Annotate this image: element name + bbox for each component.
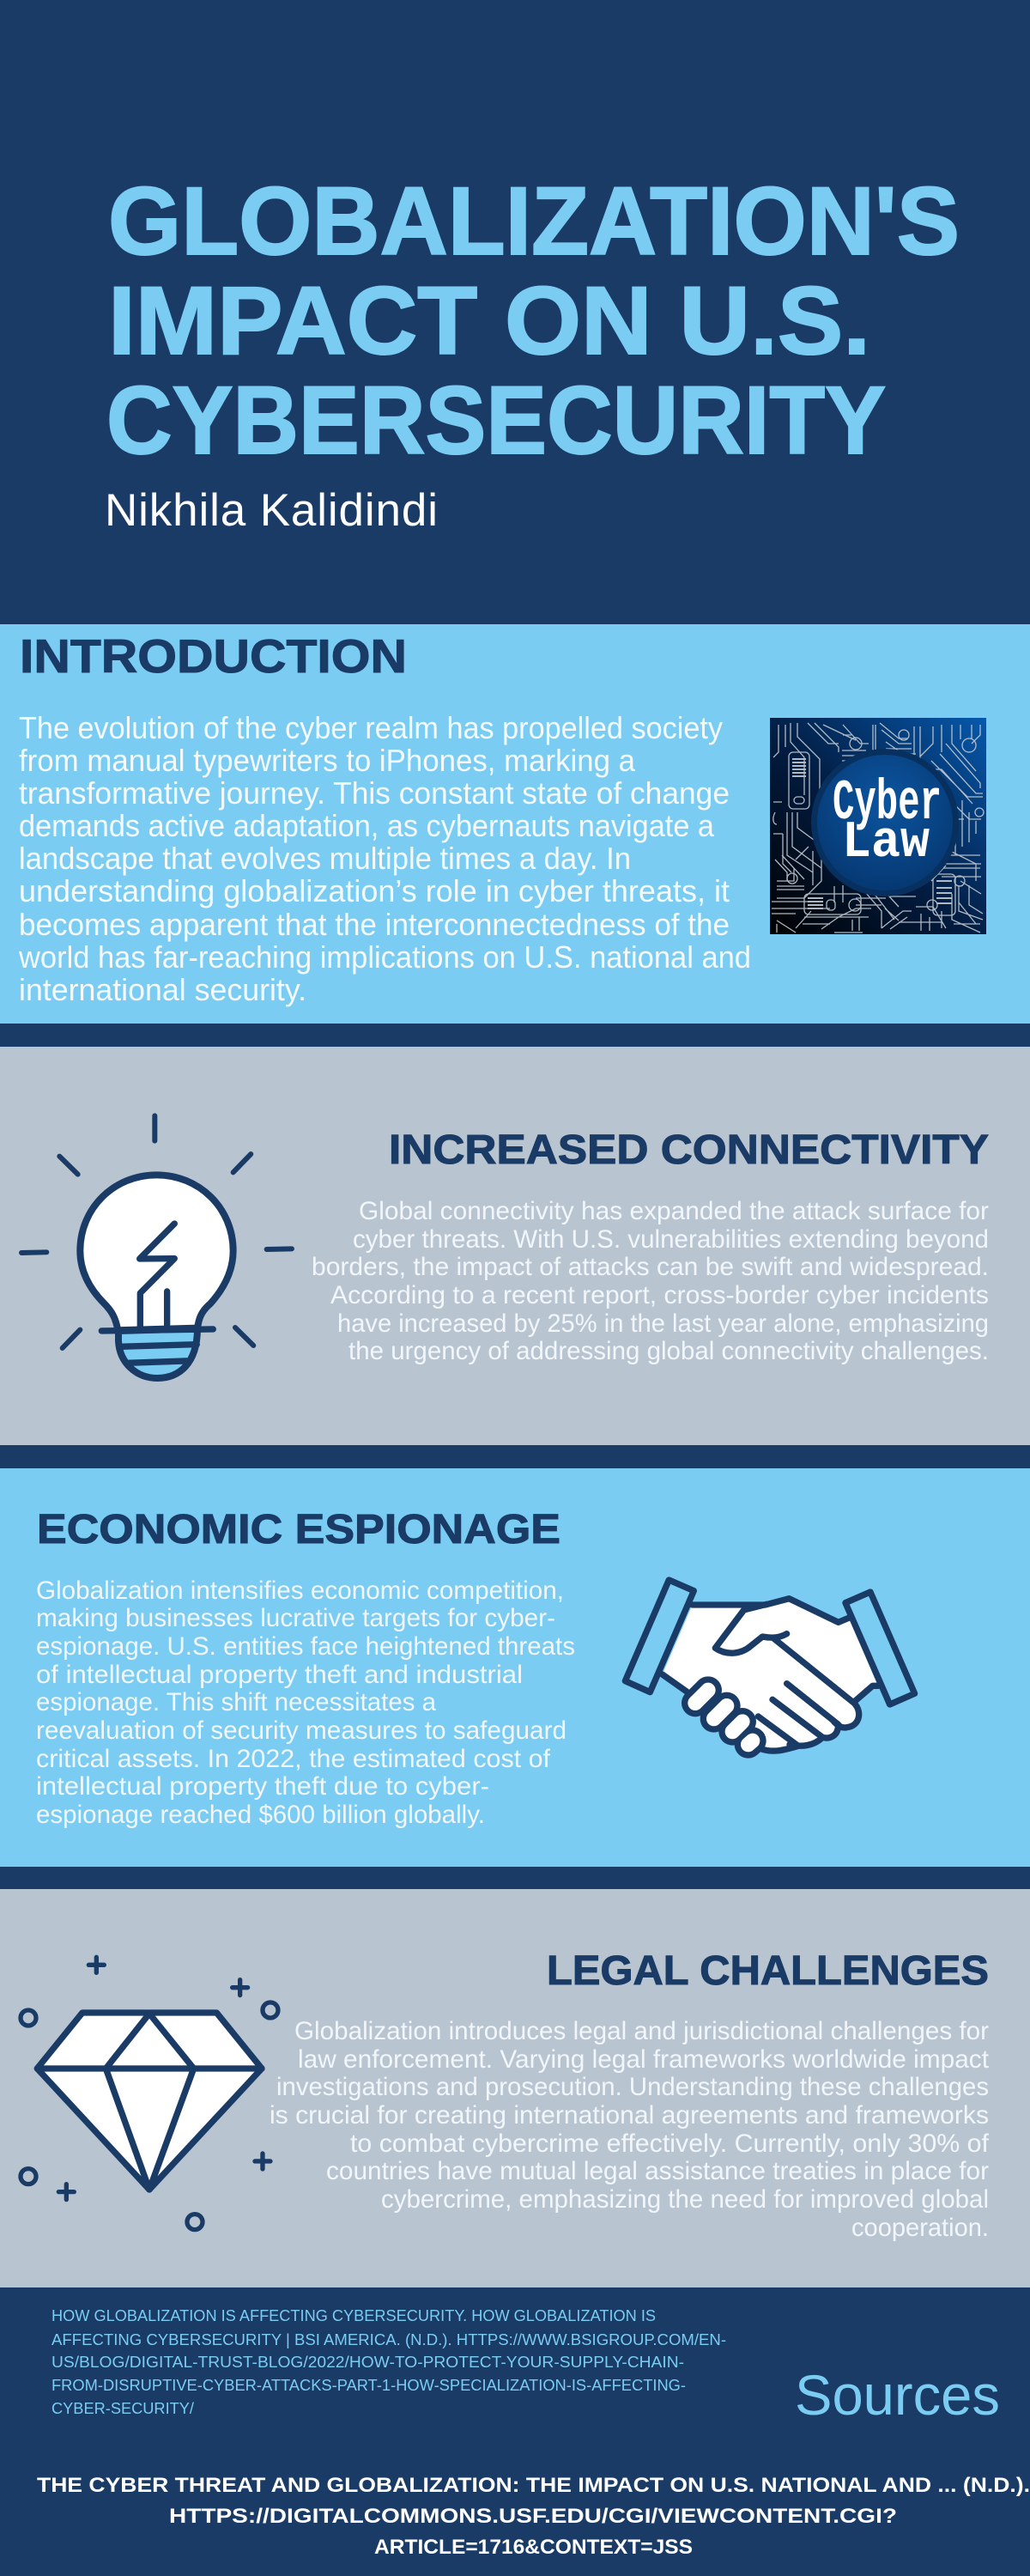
text block: legal challenges: countries have mutual legal assistance treaties in place for (326, 2157, 989, 2185)
text block: economic espionage: espionage reached $600 billion globally. (36, 1801, 485, 1829)
text block: economic espionage: critical assets. In 2022, the estimated cost of (36, 1745, 551, 1773)
text block: legal challenges (270, 2017, 990, 2242)
text block: second source: THE CYBER THREAT AND GLOBALIZATION: THE IMPACT ON U.S. NATIONAL AND ... (N.D.). (37, 2474, 1030, 2497)
text block: increased connectivity: According to a recent report, cross-border cyber incidents (330, 1281, 989, 1309)
text block: introduction: The evolution of the cyber realm has propelled society (19, 710, 723, 745)
text block: introduction: from manual typewriters to iPhones, marking a (19, 743, 636, 778)
text block: economic espionage: espionage. U.S. entities face heightened threats (36, 1632, 575, 1661)
image: cyber law: Cyber (833, 771, 942, 835)
text block: increased connectivity: Global connectivity has expanded the attack surface for (359, 1197, 989, 1225)
text block: legal challenges: to combat cybercrime effectively. Currently, only 30% of (350, 2129, 990, 2158)
author name: Nikhila Kalidindi (105, 485, 438, 536)
text block: increased connectivity: borders, the impact of attacks can be swift and widespread. (312, 1253, 989, 1281)
title: IMPACT ON U.S. (108, 267, 870, 374)
text block: economic espionage: espionage. This shift necessitates a (36, 1688, 436, 1716)
text block: increased connectivity (312, 1197, 989, 1365)
text block: introduction: international security. (19, 972, 306, 1007)
header panel (105, 167, 960, 536)
panel: sources (37, 2307, 1030, 2559)
panel: economic espionage (0, 1468, 1030, 1867)
text block: economic espionage: reevaluation of security measures to safeguard (36, 1716, 566, 1745)
text block: first source: HOW GLOBALIZATION IS AFFECTING CYBERSECURITY. HOW GLOBALIZATION IS (52, 2307, 656, 2324)
panel: legal challenges (0, 1889, 1030, 2287)
text block: economic espionage: making businesses lucrative targets for cyber- (36, 1604, 555, 1632)
text block: first source: US/BLOG/DIGITAL-TRUST-BLOG/2022/HOW-TO-PROTECT-YOUR-SUPPLY-CHAIN- (52, 2354, 684, 2371)
heading: increased connectivity: INCREASED CONNECTIVITY (389, 1127, 989, 1173)
image: cyber law (770, 718, 986, 934)
heading: economic espionage: ECONOMIC ESPIONAGE (37, 1507, 560, 1552)
text block: legal challenges: law enforcement. Varying legal frameworks worldwide impact (298, 2045, 990, 2074)
text block: legal challenges: cybercrime, emphasizing the need for improved global (381, 2185, 989, 2214)
text block: first source: CYBER-SECURITY/ (52, 2400, 194, 2417)
text block: introduction (18, 710, 751, 1007)
text block: economic espionage: Globalization intensifies economic competition, (36, 1577, 564, 1605)
icon: diamond (21, 1957, 278, 2230)
text block: second source (37, 2474, 1030, 2559)
text block: legal challenges: investigations and prosecution. Understanding these challenges (276, 2073, 989, 2101)
text block: increased connectivity: cyber threats. With U.S. vulnerabilities extending beyond (353, 1225, 989, 1254)
heading: legal challenges: LEGAL CHALLENGES (547, 1948, 989, 1994)
text block: increased connectivity: have increased by 25% in the last year alone, emphasizing (337, 1309, 989, 1338)
text block: first source (52, 2307, 726, 2417)
title: GLOBALIZATION'S (108, 167, 960, 275)
image: cyber law: Law (842, 814, 930, 872)
text block: introduction: becomes apparent that the interconnectedness of the (19, 907, 730, 942)
text block: introduction: transformative journey. This constant state of change (19, 775, 730, 811)
text block: increased connectivity: the urgency of addressing global connectivity challenges. (348, 1337, 989, 1365)
icon: handshake (625, 1580, 915, 1751)
text block: first source: FROM-DISRUPTIVE-CYBER-ATTACKS-PART-1-HOW-SPECIALIZATION-IS-AFFECTING- (52, 2377, 686, 2394)
text block: legal challenges: cooperation. (851, 2214, 989, 2242)
text block: introduction: understanding globalization’s role in cyber threats, it (19, 873, 730, 908)
heading: sources: Sources (795, 2363, 1000, 2427)
heading: introduction: INTRODUCTION (20, 629, 407, 683)
title (106, 167, 960, 474)
icon: light bulb (21, 1115, 292, 1378)
text block: introduction: landscape that evolves multiple times a day. In (19, 841, 631, 876)
text block: second source: HTTPS://DIGITALCOMMONS.USF.EDU/CGI/VIEWCONTENT.CGI? (169, 2505, 897, 2528)
text block: second source: ARTICLE=1716&CONTEXT=JSS (374, 2536, 693, 2559)
panel: introduction (0, 624, 1030, 1024)
text block: first source: AFFECTING CYBERSECURITY | BSI AMERICA. (N.D.). HTTPS://WWW.BSIGROUP.COM/EN- (52, 2331, 726, 2348)
text block: economic espionage: intellectual property theft due to cyber- (36, 1772, 489, 1801)
text block: introduction: demands active adaptation, as cybernauts navigate a (19, 808, 715, 843)
text block: economic espionage (36, 1577, 575, 1829)
text block: economic espionage: of intellectual property theft and industrial (36, 1661, 523, 1689)
panel: increased connectivity (0, 1047, 1030, 1445)
text block: legal challenges: Globalization introduces legal and jurisdictional challenges for (294, 2017, 989, 2045)
text block: legal challenges: is crucial for creating international agreements and frameworks (270, 2101, 989, 2129)
title: CYBERSECURITY (106, 367, 886, 474)
text block: introduction: world has far-reaching implications on U.S. national and (18, 939, 751, 975)
